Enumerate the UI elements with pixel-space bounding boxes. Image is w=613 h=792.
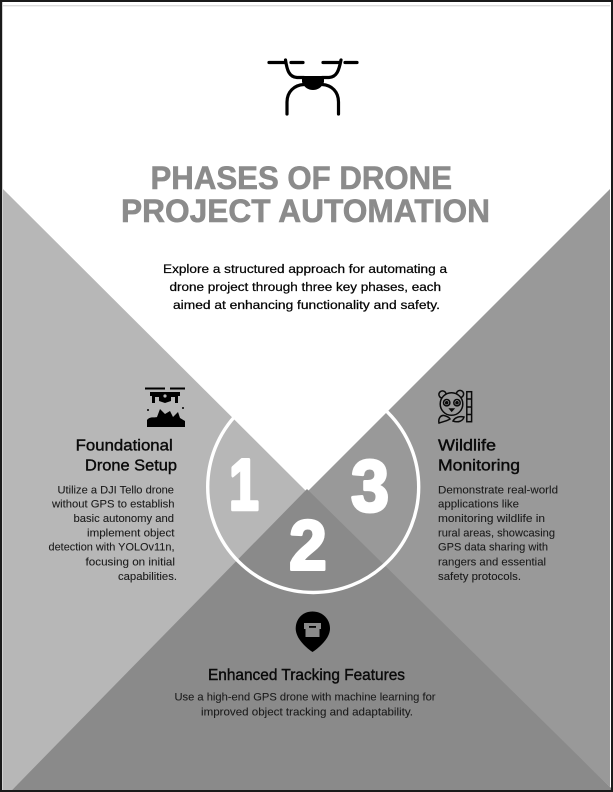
text: wildlife description: Demonstrate real-world [438,484,558,496]
panel: enhanced tracking features [174,612,436,719]
text: foundational description: focusing on initial [86,556,175,568]
heading: foundational drone setup [76,438,177,475]
intro text: drone project through three key phases, each [170,280,441,294]
text: tracking description [174,692,436,719]
intro text: aimed at enhancing functionality and safety. [173,298,440,312]
heading: foundational drone setup: Foundational [76,438,173,455]
text: tracking description: improved object tracking and adaptability. [201,707,413,719]
heading: wildlife monitoring: Monitoring [438,458,520,475]
text: foundational description: detection with YOLOv11n, [48,542,174,554]
text: wildlife description: GPS data sharing with [438,542,548,554]
text: foundational description: Utilize a DJI Tello drone [58,484,174,496]
text: foundational description: basic autonomy and [74,513,174,525]
intro text [163,262,447,312]
icon: location pin with box [296,612,330,652]
panel: left triangle background [3,189,307,790]
number 3: 3 [351,446,389,528]
title [121,160,490,229]
text: foundational description: capabilities. [118,571,177,583]
text: wildlife description: rangers and essential [438,556,546,568]
text: wildlife description: rural areas, showcasing [438,528,555,540]
icon: panda and bamboo [439,390,472,423]
text: foundational description: implement object [87,528,174,540]
text: wildlife description: applications like [438,498,519,510]
panel: foundational drone setup [48,388,185,583]
circle outline [208,382,419,592]
title: PHASES OF DRONE [150,160,452,196]
number 2: 2 [289,505,327,585]
text: wildlife description [438,484,558,583]
panel: right triangle background [307,189,613,790]
icon: drone [269,60,357,114]
heading: enhanced tracking features: Enhanced Tracking Features [208,667,405,684]
panel: bottom triangle background [12,489,613,790]
heading: foundational drone setup: Drone Setup [85,458,177,475]
text: wildlife description: monitoring wildlife in [438,513,545,525]
heading: wildlife monitoring: Wildlife [438,438,496,455]
number 1: 1 [229,446,259,525]
text: tracking description: Use a high-end GPS drone with machine learning for [174,692,436,704]
heading: wildlife monitoring [438,438,520,475]
text: foundational description [48,484,177,583]
intro text: Explore a structured approach for automating a [163,262,447,276]
icon: drone over terrain [145,388,185,427]
title: PROJECT AUTOMATION [121,193,490,229]
text: foundational description: without GPS to establish [51,498,174,510]
panel: wildlife monitoring [438,390,558,583]
text: wildlife description: safety protocols. [438,571,521,583]
